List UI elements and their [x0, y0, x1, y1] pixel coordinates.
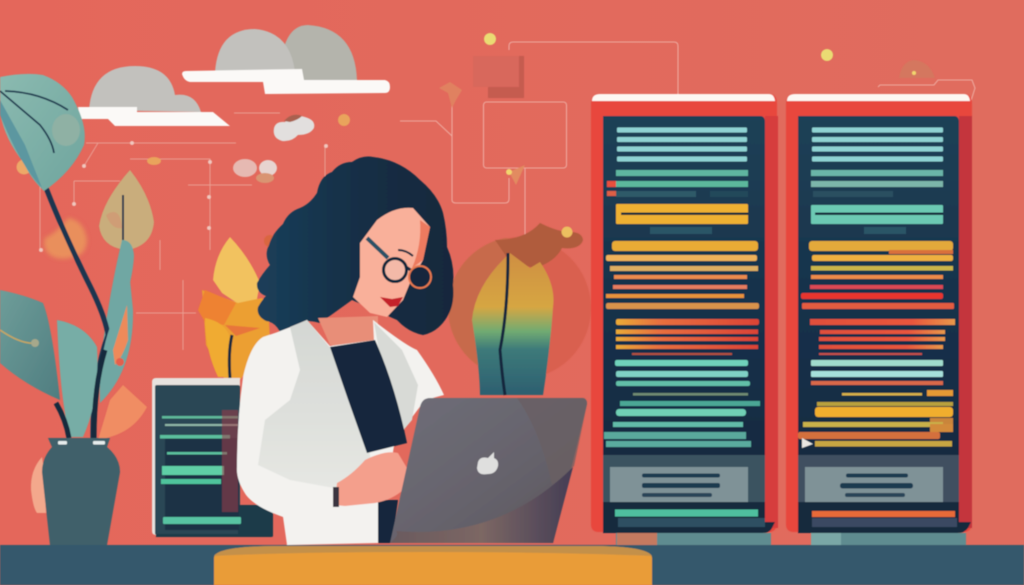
data rows: mint and amber: [798, 360, 953, 448]
server casing: [591, 94, 777, 532]
plant stems lower: [56, 350, 105, 438]
server stands: [616, 533, 966, 545]
data block: mint: [811, 205, 943, 234]
cuff: [333, 487, 339, 507]
screen panel: [798, 116, 971, 533]
lapel right: [374, 322, 418, 440]
cloud: right: [182, 25, 390, 94]
small cloud: [274, 115, 314, 141]
cloud: left: [78, 66, 230, 126]
floating spheres: [233, 159, 277, 183]
data rows: red: [616, 319, 759, 355]
data rows: teal: [811, 170, 943, 197]
server: left: [591, 94, 778, 533]
data rows: cyan: [812, 128, 943, 162]
data rows: mint: [604, 360, 760, 447]
bottom bar: [615, 510, 765, 527]
yellow plant behind person: [198, 237, 270, 380]
data rows: cyan: [617, 128, 747, 162]
server casing: [786, 94, 972, 532]
glasses: [367, 238, 431, 288]
vase: [42, 438, 120, 545]
coat shading: [258, 320, 372, 490]
lips: [380, 297, 403, 307]
apple-style logo: [477, 452, 498, 474]
leaf: right: [100, 280, 133, 403]
circuit lines right of head: [400, 42, 975, 257]
leaf: bottom left: [0, 290, 60, 400]
face: [353, 208, 430, 317]
circuit lines left: [40, 113, 325, 350]
screen panel: [603, 116, 775, 533]
circuit nodes left: [39, 114, 350, 252]
shirt: [330, 340, 407, 453]
small monitor: [152, 378, 273, 537]
leaf: slender teal: [102, 240, 134, 350]
data rows: amber: [801, 241, 954, 309]
scientist: [237, 157, 453, 545]
leaf: tan: [99, 170, 154, 250]
data rows: teal: [607, 170, 748, 197]
peach ball: [16, 160, 32, 174]
eyebrow: [398, 250, 413, 256]
orange blob behind stem: [44, 218, 87, 259]
leaf: peach behind vase left: [31, 457, 46, 513]
circuit nodes and boxes, top: [439, 33, 935, 185]
data block: yellow: [616, 204, 748, 234]
shirt lower: [378, 500, 398, 543]
neck: [318, 316, 378, 347]
data rows: red: [810, 319, 955, 355]
control panel: [798, 455, 959, 502]
leaf: middle: [57, 320, 97, 437]
coat: [237, 320, 444, 545]
leaf: large teal top: [0, 74, 85, 191]
floor: [0, 545, 1024, 585]
face shadow side: [412, 220, 430, 268]
hand: [335, 452, 407, 506]
leaf: peach behind vase right: [98, 385, 147, 440]
data rows: amber: [606, 241, 759, 309]
plant behind laptop: [448, 223, 591, 395]
server: right: [786, 94, 972, 533]
laptop: [390, 398, 587, 543]
hair: [257, 157, 453, 335]
bottom bar: [812, 511, 957, 527]
plant stem: [43, 180, 108, 440]
table: [214, 546, 652, 585]
control panel: [603, 455, 765, 502]
